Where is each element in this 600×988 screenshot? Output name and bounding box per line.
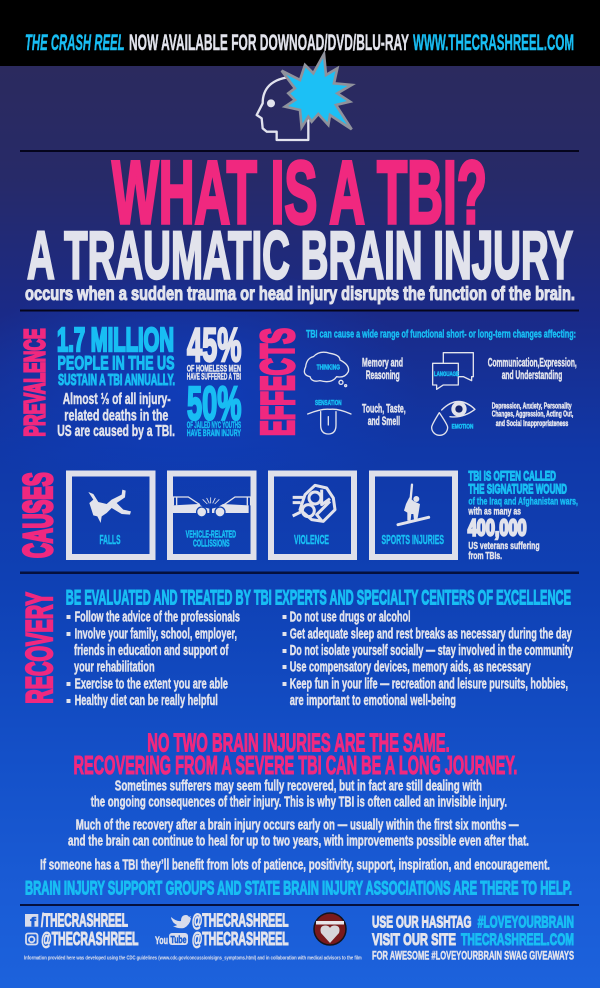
icon: sensation tongue	[308, 400, 351, 434]
icon: love your brain badge	[314, 913, 346, 945]
stat: 1.7 million: PEOPLE IN THE US	[58, 352, 174, 374]
stat: 45%: HAVE SUFFERED A TBI	[187, 371, 241, 382]
list: left column: Involve your family, school, employer,	[75, 625, 237, 642]
stat: 50%: HAVE BRAIN INJURY	[187, 428, 241, 439]
stat: 45%: 45%	[187, 318, 242, 371]
label: communication	[488, 358, 577, 382]
text: invisible injury	[91, 779, 507, 811]
footnote: Information provided here was developed using the CDC guidelines (www.cdc.gov/concussion/signs_symptoms.html) and in collaboration with medical advisors to the film	[24, 955, 362, 961]
panel: effects	[252, 328, 577, 436]
icon: thinking cloud: THINKING	[317, 364, 340, 371]
stat: 50%	[187, 376, 242, 439]
top banner: THE CRASH REEL	[25, 30, 124, 55]
list: left column	[66, 609, 240, 709]
icon: youtube: Tube	[170, 935, 187, 946]
heading: no two brain injuries	[74, 730, 517, 780]
list: right column: Do not use drugs or alcohol	[290, 609, 411, 626]
icon: fist	[293, 485, 335, 521]
icon: facebook: f	[30, 915, 37, 930]
footer: social links: @THECRASHREEL	[192, 911, 289, 931]
text: injury-related deaths: US are caused by a TBI.	[57, 423, 175, 440]
footer: hashtag and site: USE OUR HASHTAG	[372, 912, 472, 931]
card: violence: VIOLENCE	[294, 532, 329, 547]
card: falls: FALLS	[100, 532, 121, 547]
text: injury-related deaths: related deaths in the	[64, 408, 169, 425]
stat: 45%	[187, 318, 242, 382]
label: memory and reasoning	[362, 358, 403, 382]
footer: hashtag and site: VISIT OUR SITE	[372, 930, 456, 949]
list: left column: Follow the advice of the professionals	[75, 609, 240, 626]
list: right column	[282, 609, 573, 709]
heading: prevalence: PREVALENCE	[20, 329, 52, 436]
label: emotion details	[492, 401, 573, 428]
icon: thinking cloud	[304, 352, 349, 387]
stat: 45%: OF HOMELESS MEN	[187, 364, 241, 375]
label: touch taste smell	[362, 404, 406, 428]
card: vehicle collisions: VEHICLE-RELATED	[186, 530, 236, 541]
heading: effects: EFFECTS	[252, 328, 304, 436]
footer: social links	[25, 911, 289, 949]
footer: social links: @THECRASHREEL	[192, 929, 289, 949]
panel: causes	[16, 468, 578, 562]
icon: falling person	[88, 490, 131, 523]
card: falls	[69, 474, 152, 557]
stat: 50%: 50%	[187, 376, 242, 430]
label: memory and reasoning: Memory and	[362, 358, 403, 370]
footer: social links: @THECRASHREEL	[41, 929, 139, 949]
icon: facebook	[25, 914, 38, 930]
text: injury-related deaths: Almost ⅓ of all injury-	[63, 391, 171, 408]
callout: signature wound: US veterans suffering	[468, 540, 540, 552]
stat: 1.7 million: 1.7 MILLION	[57, 321, 174, 358]
icon: snowboarder	[398, 485, 429, 525]
icon: emotion eye and tear: EMOTION	[452, 423, 474, 430]
infographic: OF JAILED NYC YOUTHS	[187, 420, 241, 431]
label: touch taste smell: Touch, Taste,	[362, 404, 406, 416]
stat: 1.7 million: SUSTAIN A TBI ANNUALLY.	[58, 372, 175, 389]
icon: head with impact burst	[257, 54, 352, 140]
stat: 1.7 million	[57, 321, 175, 389]
card: vehicle collisions	[170, 474, 254, 557]
icon: sensation tongue: SENSATION	[315, 400, 342, 407]
list: left column: friends in education and support of	[74, 642, 229, 659]
icon: youtube: You	[155, 935, 168, 947]
list: right column: are important to emotional well-being	[290, 692, 456, 709]
list: left column: your rehabilitation	[74, 659, 155, 676]
callout: signature wound	[468, 468, 578, 562]
heading: causes: CAUSES	[16, 472, 60, 558]
icon: instagram	[26, 934, 38, 944]
card: violence	[271, 474, 354, 557]
panel: long journey	[25, 730, 572, 899]
icon: language bubbles	[433, 353, 473, 389]
label: touch taste smell: and Smell	[368, 416, 400, 428]
panel: recovery	[19, 586, 573, 709]
callout: signature wound: 400,000	[468, 514, 527, 540]
callout: signature wound: with as many as	[468, 505, 521, 517]
footer: hashtag and site	[372, 912, 574, 962]
text: injury-related deaths	[57, 391, 175, 440]
card: sports injuries: SPORTS INJURIES	[382, 532, 444, 547]
text: recovery timeline	[68, 817, 529, 850]
icon: twitter	[171, 915, 191, 928]
icon: emotion eye and tear	[432, 401, 475, 435]
panel: prevalence	[20, 318, 242, 440]
footer: social links: /THECRASHREEL	[41, 911, 128, 931]
list: left column: Healthy diet can be really helpful	[75, 692, 218, 709]
card: vehicle collisions: COLLISSIONS	[193, 539, 230, 550]
heading: recovery: RECOVERY	[19, 592, 60, 704]
icon: language bubbles: LANGUAGE	[434, 371, 459, 378]
label: memory and reasoning: Reasoning	[366, 370, 400, 382]
icon: youtube	[155, 933, 188, 947]
icon: car crash	[173, 497, 251, 517]
callout: signature wound: from TBIs.	[468, 550, 502, 562]
list: left column: Exercise to the extent you are able	[75, 675, 228, 692]
card: sports injuries	[372, 474, 455, 557]
